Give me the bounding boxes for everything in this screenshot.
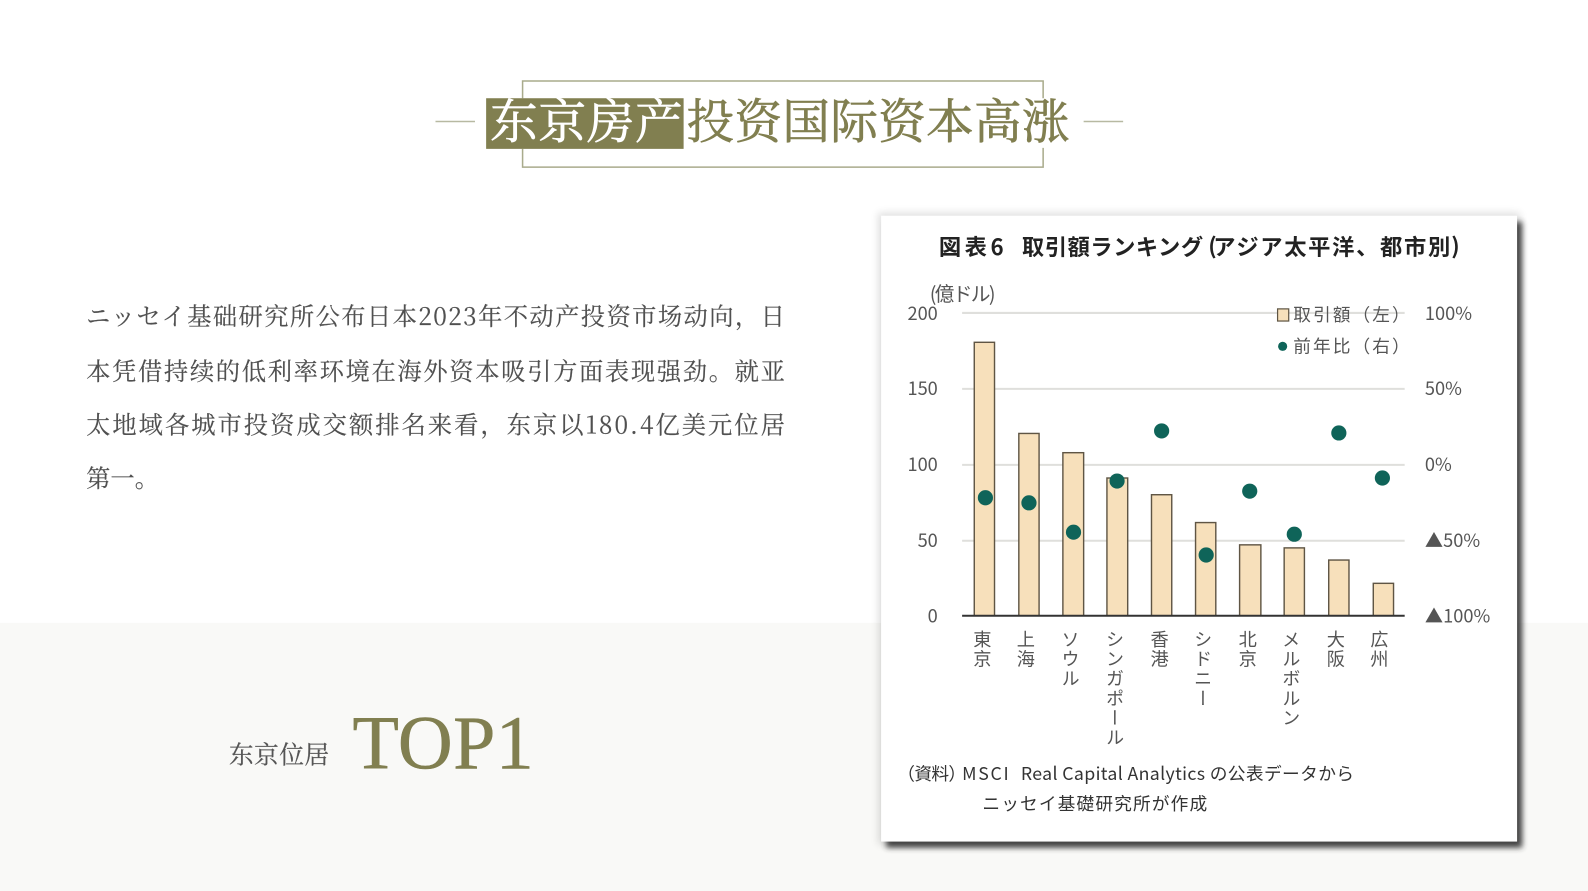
body text block: ニッセイ基础研究所公布日本2023年不动产投资市场动向，日 bbox=[86, 297, 785, 332]
source note: ニッセイ基礎研究所が作成 bbox=[982, 790, 1207, 816]
left axis labels: 200 bbox=[907, 300, 938, 326]
chart title: 取引額ランキング bbox=[1022, 230, 1203, 262]
callout: Tokyo ranks top 1 bbox=[229, 702, 534, 786]
source note: （資料） bbox=[897, 760, 966, 786]
callout: Tokyo ranks top 1: 东京位居 bbox=[229, 736, 329, 772]
legend bbox=[1278, 301, 1410, 358]
city labels: シンガポール bbox=[1102, 630, 1128, 748]
right axis labels: 50% bbox=[1425, 375, 1462, 401]
left axis labels: 100 bbox=[907, 451, 938, 477]
chart title: ) bbox=[1451, 229, 1460, 261]
lower background band bbox=[0, 623, 1588, 891]
panel: transaction ranking chart card bbox=[878, 213, 1522, 848]
source note bbox=[897, 760, 1354, 816]
city labels bbox=[969, 630, 1392, 748]
city labels: ソウル bbox=[1057, 630, 1083, 689]
title: 投资国际资本高涨 bbox=[687, 84, 1069, 153]
city labels: シドニー bbox=[1190, 630, 1216, 708]
city labels: メルボルン bbox=[1278, 630, 1304, 728]
right axis labels: ▲100% bbox=[1425, 603, 1490, 629]
city labels: 東京 bbox=[969, 630, 995, 669]
city labels: 上海 bbox=[1013, 630, 1039, 669]
legend: 取引額（左） bbox=[1293, 301, 1410, 327]
title bbox=[435, 81, 1123, 167]
chart title: アジア太平洋、都市別 bbox=[1213, 230, 1450, 262]
left axis labels: 150 bbox=[907, 375, 938, 401]
body text block: 第一。 bbox=[86, 459, 159, 494]
left axis labels: 0 bbox=[928, 603, 938, 629]
left axis labels: 50 bbox=[918, 527, 938, 553]
unit label: (億ドル) bbox=[930, 278, 996, 307]
legend: 前年比（右） bbox=[1293, 332, 1410, 358]
baseline bbox=[962, 615, 1405, 617]
chart title: 図表6 bbox=[939, 230, 1004, 262]
right axis labels bbox=[1425, 300, 1490, 629]
city labels: 大阪 bbox=[1323, 630, 1349, 669]
right axis labels: ▲50% bbox=[1425, 527, 1480, 553]
chart title bbox=[939, 229, 1460, 262]
right axis labels: 100% bbox=[1425, 300, 1472, 326]
body text block: 本凭借持续的低利率环境在海外资本吸引方面表现强劲。就亚 bbox=[86, 352, 785, 387]
city labels: 広州 bbox=[1366, 630, 1392, 669]
chart title: ( bbox=[1208, 229, 1217, 261]
right axis labels: 0% bbox=[1425, 451, 1452, 477]
source note: MSCI bbox=[962, 760, 1009, 786]
scatter: year-on-year change bbox=[978, 423, 1390, 563]
callout: Tokyo ranks top 1: TOP1 bbox=[352, 702, 534, 786]
source note: Real Capital Analytics の公表データから bbox=[1021, 760, 1354, 786]
left axis labels bbox=[907, 300, 938, 629]
grid lines bbox=[962, 313, 1405, 541]
city labels: 香港 bbox=[1147, 630, 1173, 669]
body text block bbox=[86, 297, 785, 494]
city labels: 北京 bbox=[1235, 630, 1261, 669]
body text block: 太地域各城市投资成交额排名来看，东京以180.4亿美元位居 bbox=[86, 405, 785, 440]
bar chart: transaction volume bbox=[974, 342, 1394, 616]
title: 东京房产 bbox=[490, 84, 683, 153]
